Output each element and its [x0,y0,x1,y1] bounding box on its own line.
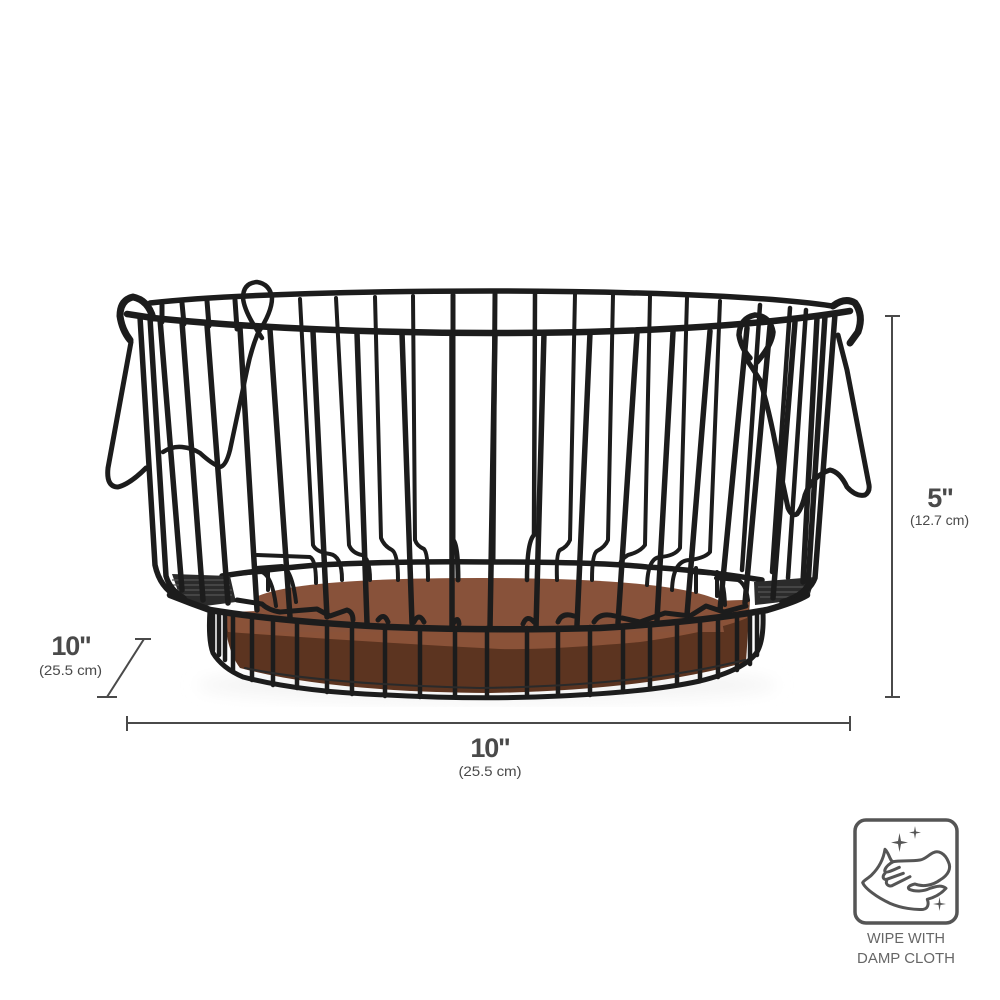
stubs and left feet [236,555,748,606]
dense corner wires [172,574,815,606]
dimension: depth 10 inches: (25.5 cm) [39,662,102,678]
dimension: height 5 inches: 5" [927,483,953,513]
right handle [747,335,869,515]
care icon: wipe with damp cloth: DAMP CLOTH [857,950,955,967]
icon: sparkles [891,826,946,911]
dimension: width 10 inches: 10" [470,733,510,763]
dimension: depth 10 inches: 10" [51,631,91,661]
wooden base [224,578,750,693]
handle loops [120,297,860,362]
front wires [140,314,835,628]
dimension: width 10 inches: (25.5 cm) [458,763,522,779]
icon: hand with cloth [863,849,950,909]
dimension: height 5 inches: (12.7 cm) [910,512,969,528]
left handle front part [108,342,146,487]
left handle back part [163,282,272,467]
dimension: height 5 inches [885,316,969,697]
front rim [127,311,850,333]
care icon: wipe with damp cloth [855,820,957,967]
base bars [209,610,763,698]
soft shadow [197,667,777,703]
care label text: WIPE WITH [867,930,945,947]
wire basket photo [108,282,869,703]
back ring [222,562,762,580]
back rim and back wires [150,291,832,590]
dimension: width 10 inches [127,716,850,779]
front lower ring [170,595,807,629]
dimension: depth 10 inches [39,631,151,697]
front foot zigzags [237,600,746,624]
